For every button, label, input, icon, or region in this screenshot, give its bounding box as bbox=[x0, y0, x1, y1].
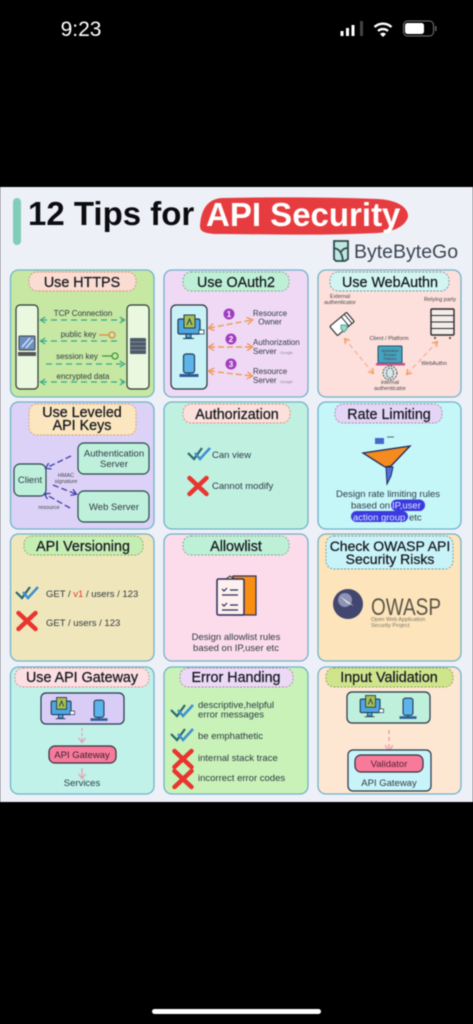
flow arrow bbox=[388, 730, 390, 750]
panel: Use OAuth2 bbox=[164, 270, 308, 397]
panel: Input Validation bbox=[318, 667, 461, 794]
versioned request row: GET / v1 / users / 123 bbox=[46, 589, 138, 600]
client platform laptop: Client / Platform bbox=[369, 336, 409, 342]
relying party server: Relying party bbox=[424, 297, 456, 303]
step labels: Server bbox=[253, 347, 277, 356]
panel: Check OWASP API Security Risks bbox=[318, 534, 461, 661]
rate limiting text: Design rate limiting rules bbox=[336, 489, 440, 500]
logo: ByteByteGo bbox=[334, 241, 458, 263]
panel: Error Handing bbox=[164, 667, 308, 794]
step badges: 2 bbox=[229, 335, 234, 344]
heading: Authorization: Authorization bbox=[195, 407, 279, 423]
heading: Use OAuth2: Use OAuth2 bbox=[197, 275, 275, 291]
arrow labels: HMAC bbox=[58, 473, 74, 479]
key arrows bbox=[45, 456, 76, 508]
step labels: Server bbox=[253, 376, 277, 385]
panel: Use WebAuthn bbox=[318, 270, 461, 397]
clients box bbox=[41, 693, 124, 724]
authentication server box bbox=[78, 443, 149, 474]
heading: Check OWASP API Security Risks: Check OWASP API bbox=[330, 538, 450, 554]
status time: 9:23 bbox=[61, 18, 101, 41]
webauthn arrows bbox=[345, 339, 437, 374]
exchange labels: public key bbox=[61, 330, 96, 339]
internal authenticator fingerprint bbox=[374, 366, 406, 392]
clients box bbox=[347, 692, 430, 723]
panel: Allowlist bbox=[164, 534, 308, 661]
heading: Use WebAuthn: Use WebAuthn bbox=[342, 275, 438, 291]
step labels: Owner bbox=[258, 318, 282, 326]
logo icon bbox=[334, 241, 348, 261]
unversioned request row: GET / users / 123 bbox=[46, 618, 120, 629]
client platform laptop: Browser bbox=[384, 353, 397, 357]
external authenticator: External bbox=[330, 294, 350, 300]
bad: internal stack trace bbox=[174, 751, 278, 767]
flow arrow bbox=[81, 728, 83, 742]
step labels bbox=[253, 309, 300, 385]
API Gateway container bbox=[348, 750, 431, 791]
panel: Rate Limiting bbox=[318, 402, 461, 529]
bad: internal stack trace: internal stack trace bbox=[198, 753, 278, 764]
panel: Use HTTPS bbox=[10, 270, 154, 397]
heading: Check OWASP API Security Risks: Security Risks bbox=[346, 551, 434, 567]
panel: Authorization bbox=[164, 402, 308, 529]
step badges bbox=[224, 308, 236, 370]
bad: incorrect error codes bbox=[174, 771, 285, 787]
title accent bar bbox=[13, 198, 21, 245]
infographic background bbox=[0, 187, 473, 802]
heading: Use Leveled API Keys: API Keys bbox=[53, 418, 111, 434]
heading: Allowlist: Allowlist bbox=[210, 539, 262, 555]
versioned request row bbox=[16, 587, 138, 600]
services label: Services bbox=[64, 778, 100, 789]
rate limiting text bbox=[336, 489, 440, 524]
rate limiting text: based on bbox=[351, 500, 390, 512]
step badges: 3 bbox=[229, 360, 234, 369]
heading: Use WebAuthn bbox=[330, 272, 449, 291]
bad: incorrect error codes: incorrect error codes bbox=[198, 773, 285, 784]
good: descriptive messages bbox=[171, 700, 274, 720]
client box bbox=[16, 305, 38, 389]
logo: OWASP: Open Web Application bbox=[371, 617, 425, 623]
step labels: Authorization bbox=[253, 338, 300, 347]
internal authenticator fingerprint: internal bbox=[381, 380, 399, 386]
exchange labels: TCP Connection bbox=[54, 309, 112, 318]
heading: Rate Limiting: Rate Limiting bbox=[347, 407, 431, 423]
authentication server box: Authentication bbox=[84, 448, 144, 460]
heading: API Versioning: API Versioning bbox=[36, 539, 130, 555]
panel: API Versioning bbox=[10, 534, 154, 661]
panel: Use API Gateway bbox=[10, 667, 154, 794]
key icons bbox=[99, 332, 118, 359]
authentication server box: Server bbox=[100, 459, 128, 470]
exchange labels: session key bbox=[56, 352, 98, 361]
heading: API Versioning bbox=[24, 536, 143, 555]
heading: Use API Gateway: Use API Gateway bbox=[26, 670, 139, 686]
arrow labels: signature bbox=[55, 479, 77, 485]
title text: 12 Tips for bbox=[28, 195, 194, 232]
heading: Use HTTPS bbox=[29, 272, 136, 291]
logo: OWASP: Security Project bbox=[371, 623, 410, 629]
heading: Allowlist bbox=[183, 536, 289, 555]
step labels: Google bbox=[280, 350, 294, 355]
heading: Check OWASP API Security Risks bbox=[326, 536, 453, 569]
webauthn label: WebAuthn bbox=[421, 361, 447, 367]
exchange labels bbox=[54, 309, 112, 381]
icon: clipboard bbox=[217, 576, 256, 615]
web server box: Web Server bbox=[89, 502, 139, 513]
flow arrow bbox=[81, 768, 83, 778]
unversioned request row bbox=[18, 613, 120, 629]
title highlight: API Security bbox=[206, 196, 401, 233]
title block bbox=[13, 195, 408, 245]
status icons bbox=[340, 21, 436, 37]
client platform laptop: Application bbox=[381, 349, 399, 353]
heading: Use Leveled API Keys bbox=[29, 404, 136, 435]
can view row: Can view bbox=[212, 450, 251, 461]
exchange labels: encrypted data bbox=[57, 372, 110, 381]
clients box bbox=[171, 305, 207, 389]
good: descriptive messages: descriptive,helpful bbox=[198, 700, 274, 711]
good: descriptive messages: error messages bbox=[198, 710, 264, 720]
step badges: 1 bbox=[227, 310, 232, 319]
good: be emphathetic: be emphathetic bbox=[198, 731, 263, 742]
rate limiting text: IP,user bbox=[392, 500, 421, 512]
step labels: Google bbox=[280, 379, 294, 384]
heading: Rate Limiting bbox=[335, 404, 442, 423]
heading: Error Handing: Error Handing bbox=[192, 670, 281, 686]
API Gateway box bbox=[49, 746, 116, 763]
internal authenticator fingerprint: authenticator bbox=[374, 386, 406, 392]
allowlist text: based on IP,user etc bbox=[193, 643, 279, 654]
step labels: Resource bbox=[253, 309, 288, 318]
allowlist text bbox=[192, 632, 281, 654]
web server box bbox=[78, 491, 149, 522]
status bar bbox=[61, 18, 436, 41]
logo: OWASP bbox=[333, 589, 441, 629]
step arrows bbox=[209, 320, 252, 376]
home indicator bbox=[152, 1009, 321, 1014]
rate limiting text: etc bbox=[409, 512, 422, 524]
validator box: Validator bbox=[371, 759, 407, 770]
step labels: Resource bbox=[253, 367, 288, 376]
arrow labels: resource bbox=[38, 505, 60, 511]
heading: Authorization bbox=[183, 404, 290, 423]
panel: Use Leveled API Keys bbox=[10, 402, 154, 529]
icon: funnel bbox=[363, 437, 410, 484]
server box bbox=[127, 305, 149, 389]
external authenticator bbox=[324, 294, 356, 336]
API Gateway box: API Gateway bbox=[54, 750, 110, 761]
external authenticator: authenticator bbox=[324, 300, 356, 306]
can view row bbox=[188, 448, 251, 461]
logo text: ByteByteGo bbox=[354, 241, 458, 263]
heading: Use HTTPS: Use HTTPS bbox=[44, 275, 120, 291]
client box bbox=[14, 464, 46, 496]
heading: Use Leveled API Keys: Use Leveled bbox=[42, 405, 122, 421]
client box: Client bbox=[18, 475, 43, 486]
API Gateway container: API Gateway bbox=[361, 778, 417, 789]
heading: Input Validation: Input Validation bbox=[340, 670, 438, 686]
good: be emphathetic bbox=[171, 729, 263, 742]
client platform laptop: Platform bbox=[383, 357, 397, 361]
heading: Use OAuth2 bbox=[183, 272, 289, 291]
heading: Error Handing bbox=[180, 668, 293, 687]
allowlist text: Design allowlist rules bbox=[192, 632, 281, 643]
cannot modify row bbox=[190, 478, 274, 494]
client platform laptop bbox=[369, 336, 409, 366]
arrow labels bbox=[38, 473, 77, 511]
exchange arrows bbox=[41, 320, 124, 382]
logo: OWASP: OWASP bbox=[371, 594, 441, 621]
cannot modify row: Cannot modify bbox=[212, 481, 274, 492]
heading: Input Validation bbox=[326, 668, 453, 687]
relying party server bbox=[424, 297, 456, 339]
rate limiting text: action group bbox=[353, 512, 405, 524]
